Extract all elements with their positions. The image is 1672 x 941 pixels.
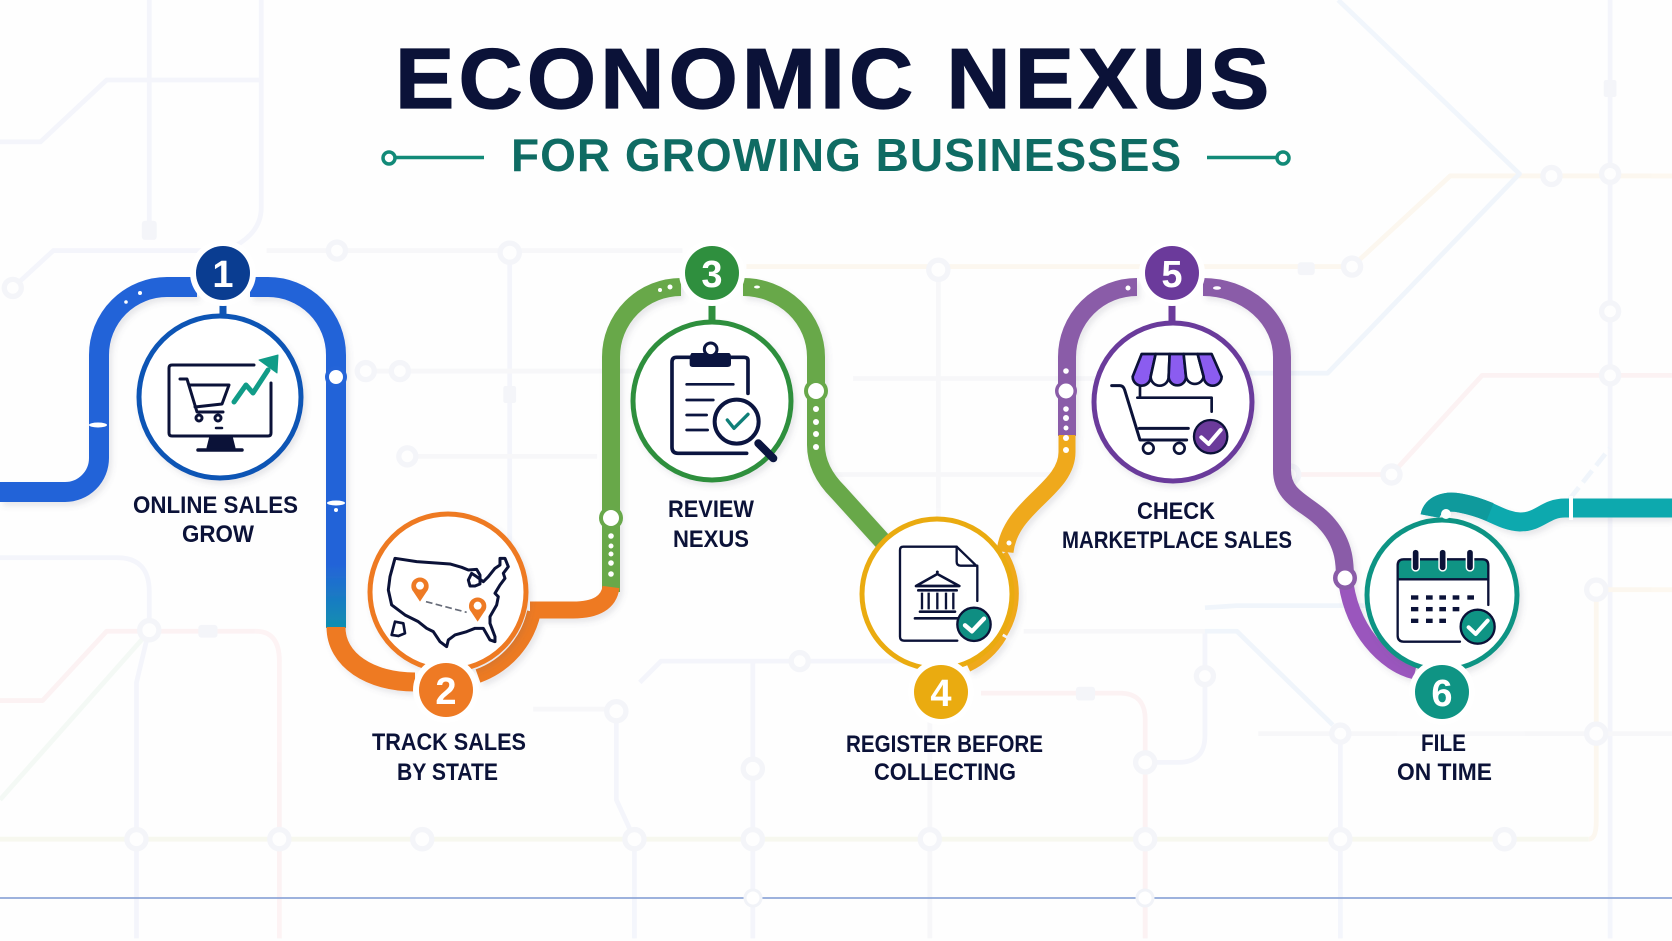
icon: bank document [900, 547, 991, 641]
label 5: MARKETPLACE SALES [1062, 527, 1292, 554]
badge 2 [413, 657, 479, 723]
label 4: REGISTER BEFORE [846, 731, 1043, 758]
badge 6 [1409, 659, 1475, 725]
ring 5 [1094, 323, 1252, 481]
step 3: review nexus [633, 240, 791, 553]
badge 3 [679, 240, 745, 306]
ring 4 [862, 519, 1012, 669]
icon: storefront cart with check [1112, 354, 1227, 454]
badge 1: 1 [212, 254, 234, 296]
label 4: COLLECTING [874, 759, 1016, 786]
step 2: track sales by state [370, 514, 526, 786]
label 2: BY STATE [397, 759, 498, 786]
title: ECONOMIC NEXUS [395, 32, 1274, 127]
badge 4 [908, 659, 974, 725]
subtitle: FOR GROWING BUSINESSES [511, 129, 1182, 181]
badge 5: 5 [1161, 254, 1183, 296]
step 6: file on time [1367, 520, 1517, 786]
icon: monitor with cart and growth arrow [169, 355, 278, 450]
ring 2 [370, 514, 526, 670]
label 2: TRACK SALES [372, 729, 526, 756]
route stations and dots [89, 284, 1573, 590]
teal line start and station [1430, 502, 1490, 519]
badge 2: 2 [435, 671, 457, 713]
subtitle decoration right [1207, 152, 1289, 164]
step 4: register before collecting [846, 519, 1043, 786]
subtitle decoration left [383, 152, 484, 164]
label 3 [668, 496, 755, 553]
label 5: CHECK [1137, 498, 1215, 525]
step 1: online sales grow [133, 240, 301, 548]
label 3: NEXUS [673, 526, 749, 553]
label 3: REVIEW [668, 496, 755, 523]
ring 6 [1367, 520, 1517, 670]
label 4 [846, 731, 1043, 786]
label 6 [1397, 730, 1492, 786]
icon: clipboard with magnifier [672, 343, 773, 458]
label 1 [133, 492, 298, 548]
label 6: FILE [1421, 730, 1466, 757]
label 6: ON TIME [1397, 759, 1492, 786]
label 2 [372, 729, 526, 786]
metro route line [0, 287, 1672, 682]
badge 4: 4 [930, 673, 952, 715]
ring 1 [139, 316, 301, 478]
step 5: check marketplace sales [1062, 240, 1292, 554]
icon: calendar with check [1398, 553, 1495, 644]
label 5 [1062, 498, 1292, 554]
badge 5 [1139, 240, 1205, 306]
icon: US map with pins [388, 558, 508, 647]
badge 1 [190, 240, 256, 306]
bottom rule with stations [0, 890, 1672, 906]
ring 3 [633, 322, 791, 480]
badge 3: 3 [701, 254, 723, 296]
badge 6: 6 [1431, 673, 1453, 715]
label 1: GROW [182, 521, 255, 548]
label 1: ONLINE SALES [133, 492, 298, 519]
